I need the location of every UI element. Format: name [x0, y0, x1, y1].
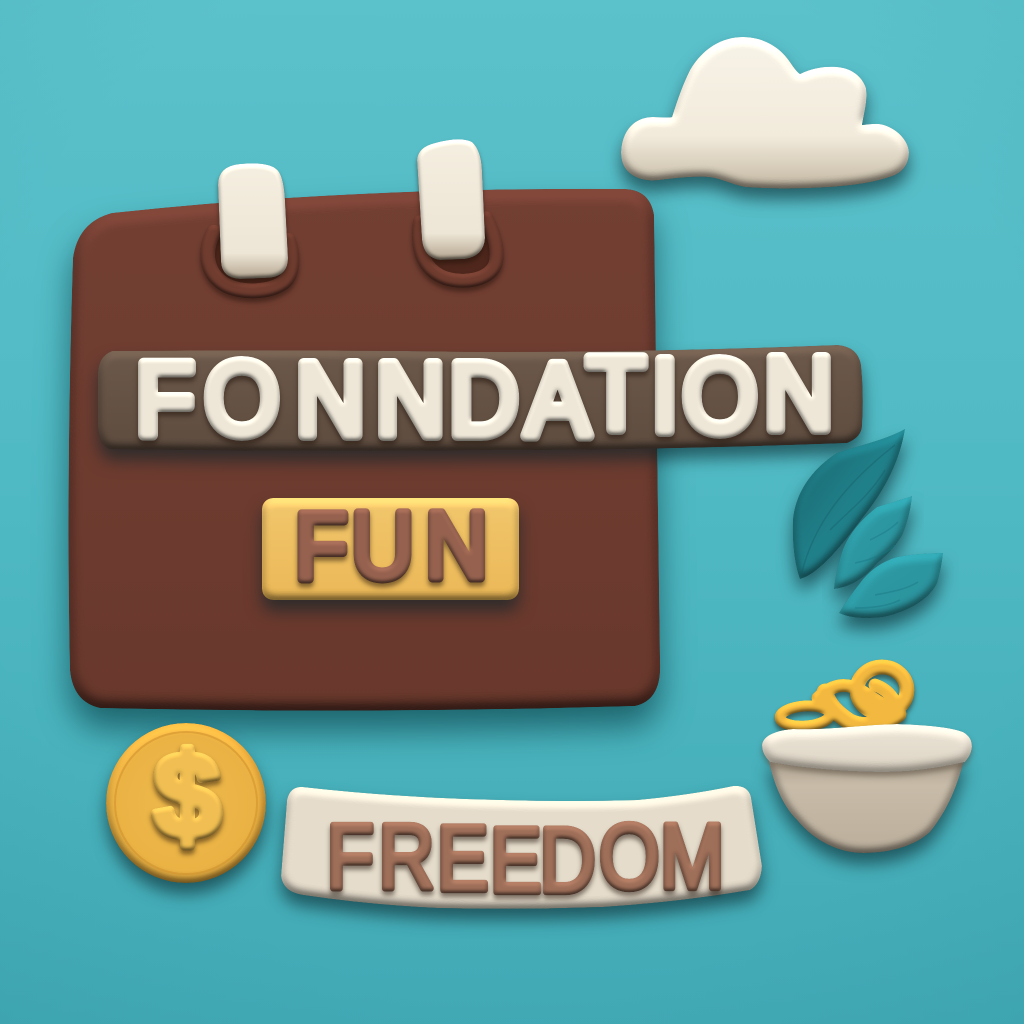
bowl rim: [762, 724, 972, 772]
freedom banner: [281, 786, 762, 912]
coin disc: [106, 723, 266, 883]
calendar ring right: [417, 139, 497, 281]
calendar ring left: [208, 163, 292, 291]
calendar: [69, 139, 660, 711]
golden knot: [779, 667, 907, 728]
coin ring: [115, 732, 257, 874]
small leaf: [839, 553, 943, 618]
banner word: FREEDOM: [326, 806, 725, 912]
badge plate: [262, 498, 519, 600]
dollar sign: $: [154, 729, 220, 863]
dollar coin: [106, 723, 266, 883]
badge word: FUN: [294, 493, 488, 600]
banner word: FONNDATION: [136, 337, 833, 459]
calendar body: [69, 189, 660, 711]
large leaf: [793, 429, 905, 579]
cloud: [621, 37, 909, 188]
middle leaf: [834, 496, 912, 589]
fun badge: [262, 493, 519, 600]
leaves: [793, 429, 943, 618]
foundation banner: [98, 337, 863, 459]
banner plate: [281, 786, 762, 909]
bowl with golden knot: [762, 667, 972, 853]
banner strip: [98, 345, 863, 451]
bowl body: [768, 756, 965, 853]
